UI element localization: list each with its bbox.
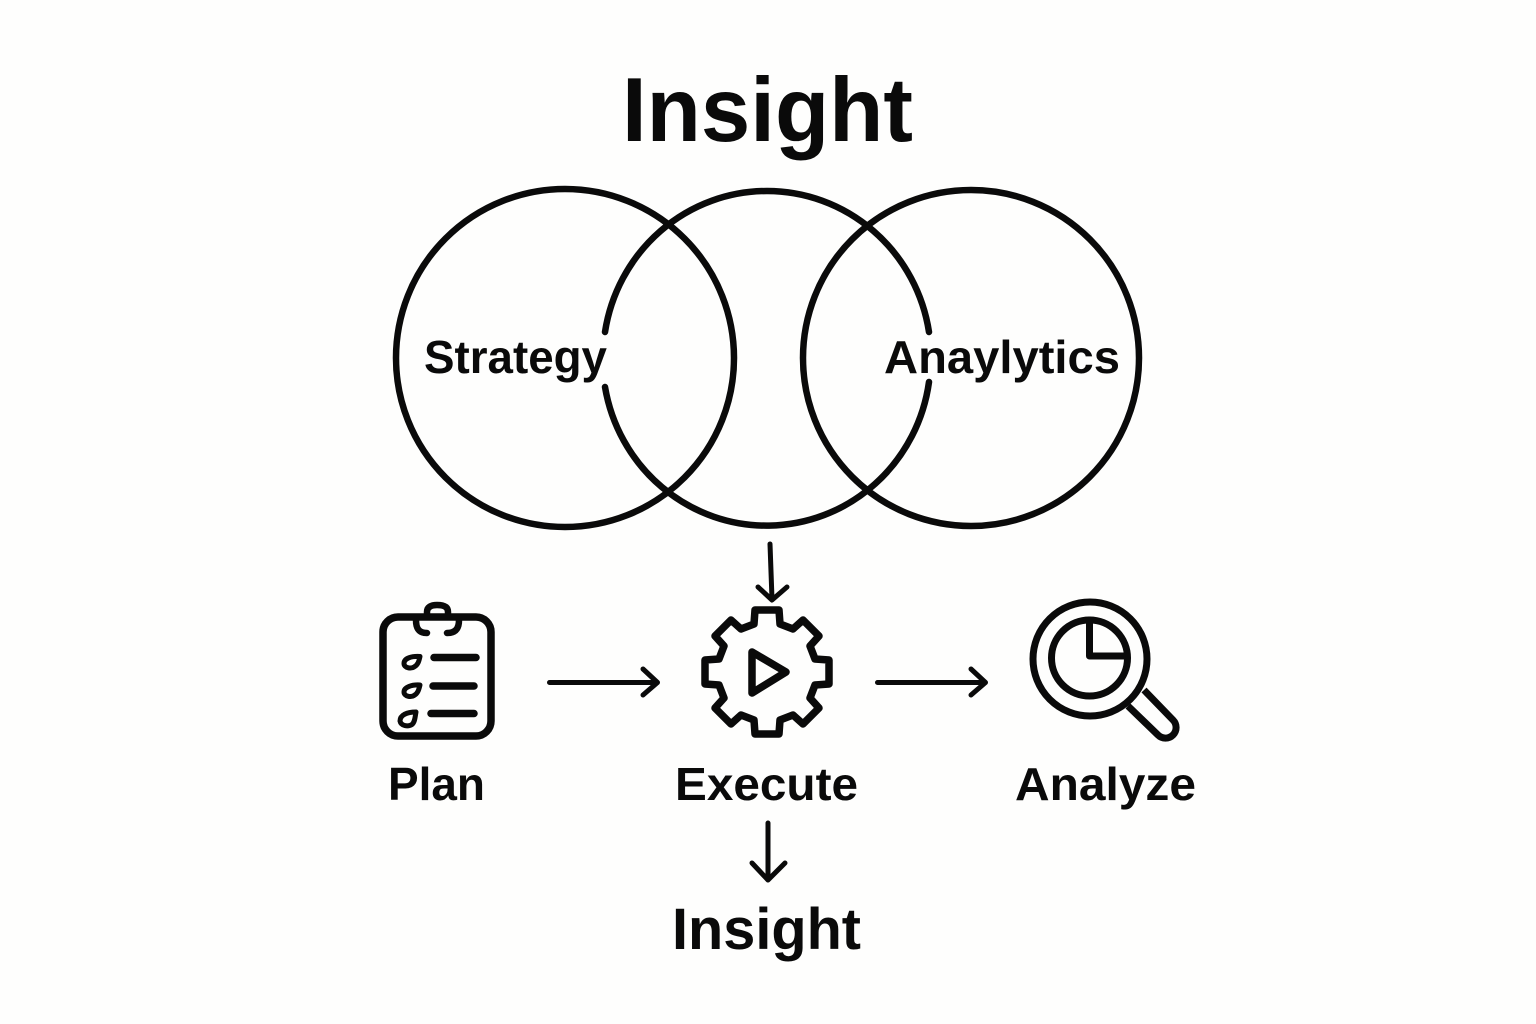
arrow: execute to insight xyxy=(752,823,785,880)
label: Execute: Execute xyxy=(675,758,858,810)
title: Insight xyxy=(622,60,913,161)
label: Anaylytics: Anaylytics xyxy=(884,331,1120,383)
circle: strategy xyxy=(396,189,734,527)
circle: center xyxy=(605,191,929,526)
arrow: plan to execute xyxy=(550,669,658,695)
label: Plan: Plan xyxy=(388,758,485,810)
circle: analytics xyxy=(803,190,1139,526)
label: Analyze: Analyze xyxy=(1015,758,1196,810)
icon: magnifier with pie chart xyxy=(1033,602,1176,738)
icon: clipboard checklist xyxy=(383,605,491,736)
arrow: execute to analyze xyxy=(878,669,986,695)
label: bottom Insight: Insight xyxy=(672,897,861,962)
icon: gear with play xyxy=(705,610,829,734)
label: Strategy: Strategy xyxy=(424,331,607,383)
arrow: venn to execute xyxy=(758,544,787,600)
venn diagram xyxy=(396,189,1139,527)
